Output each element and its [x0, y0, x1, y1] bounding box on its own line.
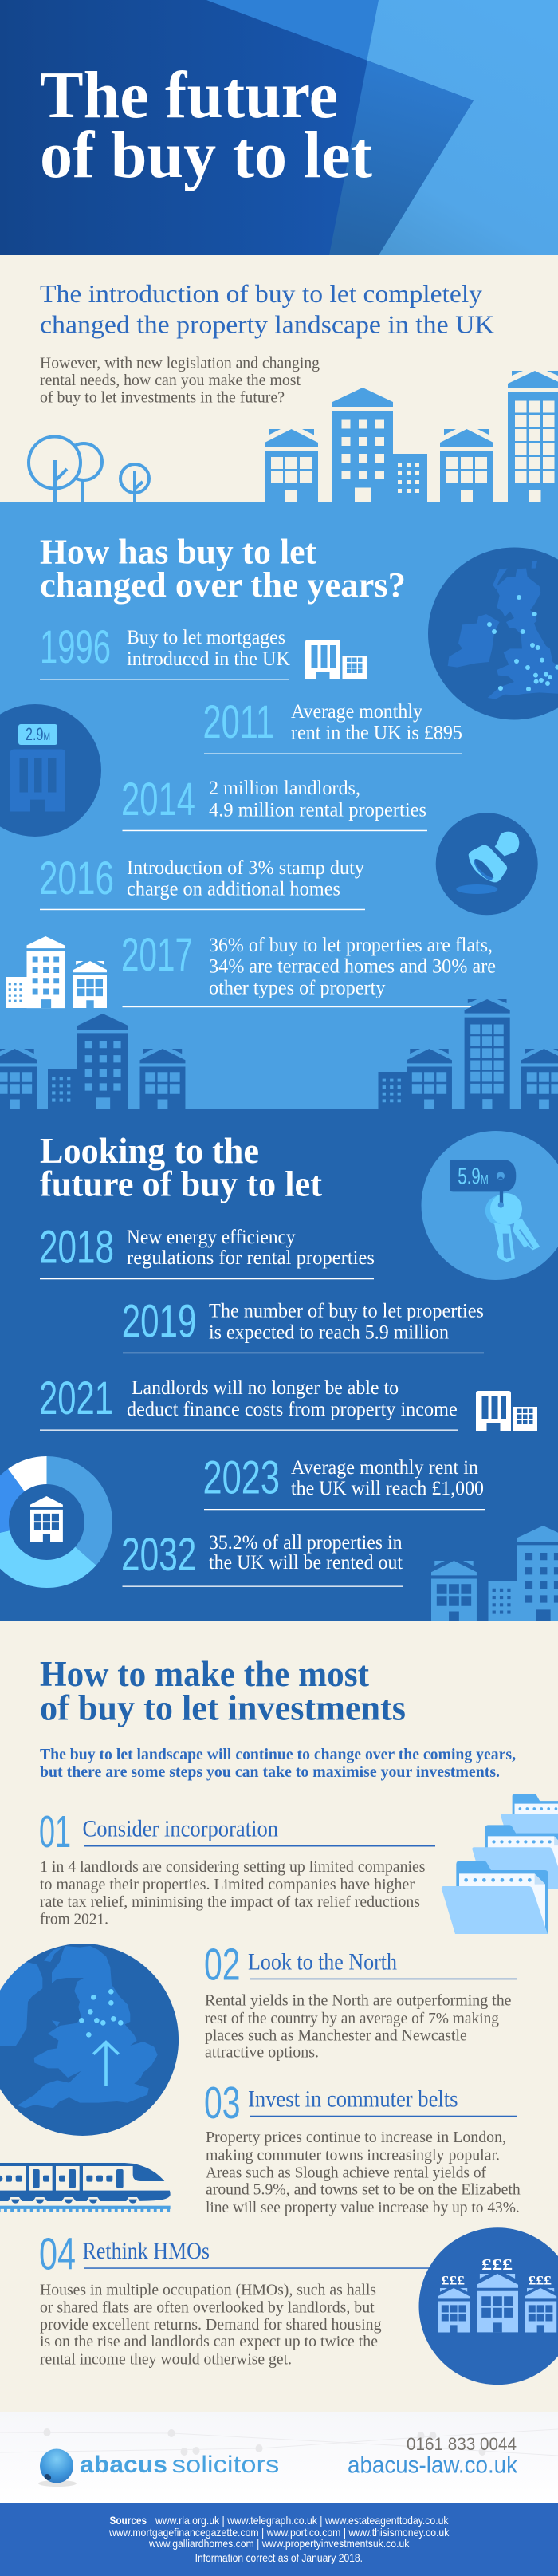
- step 02: [204, 1940, 517, 2062]
- icon: office buildings: [476, 1391, 537, 1431]
- step 03: [204, 2078, 521, 2216]
- 2018 entry: [39, 1222, 375, 1279]
- icon: buildings skyline: [265, 371, 558, 502]
- 2032 entry: 35.2% of all properties in: [209, 1530, 403, 1554]
- title: of buy to let: [40, 118, 372, 192]
- 2017 entry: 36% of buy to let properties are flats,: [209, 933, 493, 956]
- step 02: attractive options.: [205, 2044, 319, 2062]
- icon: trees: [29, 437, 149, 502]
- panel: sources footer: www.galliardhomes.com | www.propertyinvestmentsuk.co.uk: [148, 2537, 410, 2550]
- icon: train: [0, 2163, 171, 2212]
- icon: keys circle: [421, 1131, 558, 1280]
- panel: sources footer: [0, 2503, 558, 2576]
- 2017 entry: other types of property: [209, 976, 386, 999]
- 2023 entry: Average monthly rent in: [291, 1455, 478, 1479]
- 2017 entry: 34% are terraced homes and 30% are: [209, 954, 496, 977]
- heading: How has buy to let: [40, 533, 316, 571]
- intro heading: [40, 279, 494, 338]
- title: [40, 58, 372, 192]
- 2017 entry: 2017: [121, 929, 193, 981]
- step 03: line will see property value increase by up to 43%.: [206, 2199, 520, 2216]
- step 01: [39, 1806, 435, 1928]
- icon: folders: [442, 1794, 558, 1934]
- icon: 2.9M building circle: [0, 704, 101, 837]
- step 03: around 5.9%, and towns set to be on the Elizabeth: [206, 2181, 521, 2199]
- 1996 entry: 1996: [40, 621, 111, 673]
- step 04: Houses in multiple occupation (HMOs), such as halls: [40, 2281, 376, 2298]
- 1996 entry: [40, 621, 291, 679]
- 2019 entry: is expected to reach 5.9 million: [209, 1321, 449, 1344]
- step 04: Rethink HMOs: [83, 2238, 210, 2264]
- 2011 entry: Average monthly: [291, 699, 422, 723]
- 2018 entry: 2018: [39, 1222, 114, 1274]
- icon: dark skyline: [0, 999, 558, 1109]
- website: abacus-law.co.uk: [348, 2452, 518, 2479]
- 2023 entry: 2023: [202, 1452, 280, 1504]
- 2014 entry: 4.9 million rental properties: [209, 798, 426, 821]
- step 02: 02: [204, 1940, 241, 1991]
- panel: sources footer: www.mortgagefinancegazette.com | www.portico.com | www.thisismoney.co.uk: [108, 2526, 450, 2539]
- step 01: Consider incorporation: [83, 1816, 278, 1842]
- heading: of buy to let investments: [40, 1688, 406, 1727]
- heading: Looking to the: [40, 1131, 259, 1171]
- step 03: making commuter towns increasingly popular.: [206, 2147, 500, 2164]
- step 03: Areas such as Slough achieve rental yields of: [206, 2164, 486, 2182]
- 2021 entry: Landlords will no longer be able to: [132, 1376, 399, 1399]
- heading: [40, 1654, 406, 1727]
- heading: future of buy to let: [40, 1164, 322, 1204]
- 2016 entry: [39, 853, 365, 910]
- intro text: The buy to let landscape will continue to change over the coming years,: [40, 1746, 516, 1763]
- logo: solicitors: [172, 2452, 279, 2478]
- step 04: 04: [39, 2228, 76, 2279]
- intro heading: The introduction of buy to let completely: [40, 279, 482, 308]
- intro text: rental needs, how can you make the most: [40, 372, 301, 389]
- step 01: 1 in 4 landlords are considering setting up limited companies: [40, 1858, 426, 1876]
- step 04: or shared flats are often overlooked by landlords, but: [40, 2298, 375, 2316]
- heading: How to make the most: [40, 1654, 369, 1694]
- heading: [40, 533, 406, 605]
- panel: logo and contact footer: [0, 2412, 558, 2503]
- panel: looking to the future: [0, 1109, 558, 1621]
- 2016 entry: 2016: [39, 853, 114, 904]
- icon: keys circle: 5.9M: [458, 1164, 489, 1189]
- step 01: from 2021.: [40, 1910, 108, 1928]
- step 01: 01: [39, 1806, 71, 1857]
- 2023 entry: [202, 1452, 485, 1510]
- step 03: Property prices continue to increase in London,: [206, 2129, 506, 2146]
- 2032 entry: [121, 1529, 403, 1587]
- 1996 entry: Buy to let mortgages: [127, 625, 285, 648]
- step 04: provide excellent returns. Demand for shared housing: [40, 2316, 382, 2334]
- panel: introduction: [0, 255, 558, 502]
- intro text: However, with new legislation and changing: [40, 354, 320, 372]
- heading: [40, 1131, 322, 1204]
- icon: stamp circle: [436, 813, 538, 915]
- icon: HMO houses circle: £££: [442, 2275, 465, 2288]
- 2011 entry: [202, 696, 462, 754]
- intro text: [40, 1746, 516, 1781]
- 2021 entry: deduct finance costs from property income: [127, 1397, 458, 1420]
- title: The future: [40, 58, 338, 132]
- hero banner: [0, 0, 558, 255]
- 2014 entry: 2 million landlords,: [209, 776, 360, 799]
- 2018 entry: New energy efficiency: [127, 1225, 296, 1248]
- 2017 entry: [121, 929, 496, 1007]
- 2018 entry: regulations for rental properties: [127, 1246, 375, 1269]
- step 04: is on the rise and landlords can expect up to twice the: [40, 2333, 378, 2350]
- heading: changed over the years?: [40, 565, 406, 605]
- icon: 2.9M building circle: 2.9M: [26, 724, 50, 744]
- step 03: Invest in commuter belts: [248, 2086, 458, 2112]
- step 01: to manage their properties. Limited companies have higher: [40, 1876, 415, 1893]
- 2021 entry: 2021: [39, 1373, 113, 1424]
- 2011 entry: rent in the UK is £895: [291, 721, 462, 743]
- 2014 entry: 2014: [121, 774, 195, 825]
- step 01: rate tax relief, minimising the impact of tax relief reductions: [40, 1893, 420, 1911]
- 2019 entry: 2019: [122, 1295, 196, 1348]
- 1996 entry: introduced in the UK: [127, 647, 291, 670]
- 2014 entry: [121, 774, 427, 831]
- 2016 entry: Introduction of 3% stamp duty: [127, 856, 364, 879]
- 2032 entry: the UK will be rented out: [209, 1550, 403, 1574]
- icon: HMO houses circle: [419, 2227, 558, 2385]
- icon: white buildings: [6, 936, 107, 1008]
- panel: sources footer: www.rla.org.uk | www.telegraph.co.uk | www.estateagenttoday.co.uk: [155, 2514, 449, 2527]
- icon: UK map circle: [428, 547, 558, 719]
- step 02: places such as Manchester and Newcastle: [205, 2027, 467, 2045]
- step 02: Rental yields in the North are outperforming the: [205, 1992, 512, 2010]
- intro text: [40, 354, 320, 407]
- intro text: of buy to let investments in the future?: [40, 389, 285, 407]
- icon: HMO houses circle: £££: [528, 2275, 552, 2288]
- 2032 entry: 2032: [121, 1529, 196, 1581]
- panel: how has buy to let changed: [0, 502, 558, 1109]
- step 03: 03: [204, 2078, 241, 2129]
- 2011 entry: 2011: [202, 696, 274, 748]
- 2019 entry: [122, 1295, 484, 1353]
- panel: how to make the most: [0, 1621, 558, 2412]
- step 02: Look to the North: [248, 1948, 397, 1975]
- icon: skyline: [431, 1526, 558, 1621]
- 2016 entry: charge on additional homes: [127, 877, 340, 900]
- step 02: rest of the country by an average of 7% making: [205, 2010, 499, 2027]
- intro heading: changed the property landscape in the UK: [40, 309, 494, 338]
- donut chart: [0, 1471, 99, 1574]
- logo: [38, 2448, 279, 2487]
- step 04: rental income they would otherwise get.: [40, 2351, 292, 2369]
- phone number: 0161 833 0044: [407, 2434, 517, 2454]
- panel: sources footer: Sources: [110, 2514, 147, 2527]
- icon: England map circle: [0, 1944, 179, 2136]
- icon: office buildings: [305, 640, 367, 679]
- intro text: but there are some steps you can take to maximise your investments.: [40, 1763, 500, 1781]
- 2019 entry: The number of buy to let properties: [209, 1299, 484, 1322]
- 2023 entry: the UK will reach £1,000: [291, 1476, 484, 1499]
- step 04: [39, 2228, 430, 2369]
- logo: abacus: [80, 2452, 167, 2478]
- icon: HMO houses circle: £££: [481, 2256, 513, 2274]
- panel: sources footer: Information correct as of January 2018.: [195, 2551, 363, 2564]
- 2021 entry: [39, 1373, 458, 1431]
